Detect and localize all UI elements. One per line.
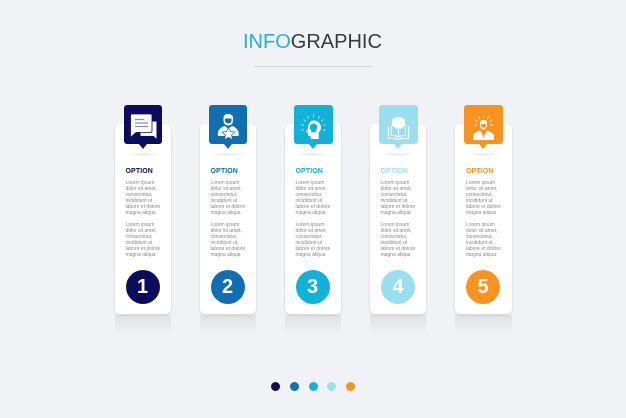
panel: option 4: dolor sit amet, [380,228,412,234]
number 3 [296,270,330,304]
panel: option 4: magna aliqua [380,252,411,258]
text 3: dolor sit amet, [296,186,327,192]
panel: option 4: consectetur, [380,234,407,240]
icon box 3 [294,104,332,144]
text 5: incididunt ut [466,198,493,204]
text 1: incididunt ut [126,198,152,204]
text 2 [210,180,246,216]
panel: option 3: magna aliqua [296,252,326,258]
panel: option 1: Lorem ipsum [126,222,154,228]
heading 5: OPTION [466,168,493,174]
heading 2: OPTION [210,168,238,174]
number 1 [126,270,160,304]
panel: option 3: labore et dolore [296,246,330,252]
text 4: incididunt ut [380,198,407,204]
icon: person with star [218,114,239,139]
card 5 [455,124,512,314]
icon box 4 [379,104,418,144]
text 3: magna aliqua [296,210,326,216]
panel: option 2: dolor sit amet, [210,228,242,234]
heading 1: OPTION [126,168,153,174]
text 3: Lorem ipsum [296,180,324,186]
heading 3: OPTION [296,168,323,174]
panel: option 5: magna aliqua [466,252,496,258]
text 5: consectetur, [466,192,493,198]
number 4: 4 [392,276,404,298]
text 2: incididunt ut [210,198,237,204]
panel: option 5: incididunt ut [466,240,493,246]
text 3: labore et dolore [296,204,330,210]
panel: option 2: incididunt ut [210,240,237,246]
text 4 [380,180,416,216]
panel: option 1: consectetur, [126,234,152,240]
text 2: dolor sit amet, [210,186,242,192]
text 1: dolor sit amet, [126,186,157,192]
panel: option 5: labore et dolore [466,246,501,252]
text 3 [296,180,330,216]
text 4: Lorem ipsum [380,180,409,186]
number 4 [381,270,415,304]
text 4: consectetur, [380,192,407,198]
text 2: consectetur, [210,192,237,198]
text 1: Lorem ipsum [126,180,154,186]
number 1: 1 [137,276,148,298]
text 2: Lorem ipsum [210,180,239,186]
panel: option 3: consectetur, [296,234,322,240]
text 1: magna aliqua [126,210,156,216]
number 3: 3 [307,276,318,298]
panel: option 3: incididunt ut [296,240,322,246]
number 2: 2 [222,276,233,298]
panel: option 1: dolor sit amet, [126,228,157,234]
text 2: magna aliqua [210,210,241,216]
number 2 [210,270,244,304]
icon: brain over open book [388,116,410,140]
card 4 [370,124,426,314]
text 5: magna aliqua [466,210,496,216]
number 5: 5 [477,276,489,298]
icon box 1 [124,104,162,144]
icon: head with lightbulb [301,114,326,139]
text 1 [126,180,160,216]
title: INFOGRAPHIC [243,31,382,53]
text 1: consectetur, [126,192,152,198]
icon box 2 [208,104,247,144]
panel: option 1: magna aliqua [126,252,156,258]
text 3: consectetur, [296,192,322,198]
card 2 [200,124,256,314]
text 4: labore et dolore [380,204,415,210]
panel: option 3: Lorem ipsum [296,222,324,228]
icon box 5 [464,104,502,144]
panel: option 4: Lorem ipsum [380,222,409,228]
text 2: labore et dolore [210,204,245,210]
panel: option 4: labore et dolore [380,246,415,252]
text 3: incididunt ut [296,198,322,204]
panel: option 5: consectetur, [466,234,493,240]
number 5 [466,270,500,304]
legend dots [271,382,355,391]
text 5 [466,180,501,216]
text 5: labore et dolore [466,204,501,210]
panel: option 2: consectetur, [210,234,237,240]
text 5: dolor sit amet, [466,186,497,192]
panel: option 3: dolor sit amet, [296,228,327,234]
panel: option 1: labore et dolore [126,246,160,252]
text 4: magna aliqua [380,210,411,216]
panel: option 2: magna aliqua [210,252,241,258]
panel: option 5: dolor sit amet, [466,228,497,234]
heading 4: OPTION [380,168,408,174]
panel: option 4: incididunt ut [380,240,407,246]
text 4: dolor sit amet, [380,186,412,192]
card 3 [284,124,341,314]
icon: chat bubbles [130,114,156,139]
panel: option 5: Lorem ipsum [466,222,495,228]
card 1 [114,124,171,314]
text 5: Lorem ipsum [466,180,495,186]
panel: option 1: incididunt ut [126,240,152,246]
text 1: labore et dolore [126,204,160,210]
icon: businessman with idea rays [473,115,494,140]
panel: option 2: Lorem ipsum [210,222,239,228]
panel: option 2: labore et dolore [210,246,245,252]
